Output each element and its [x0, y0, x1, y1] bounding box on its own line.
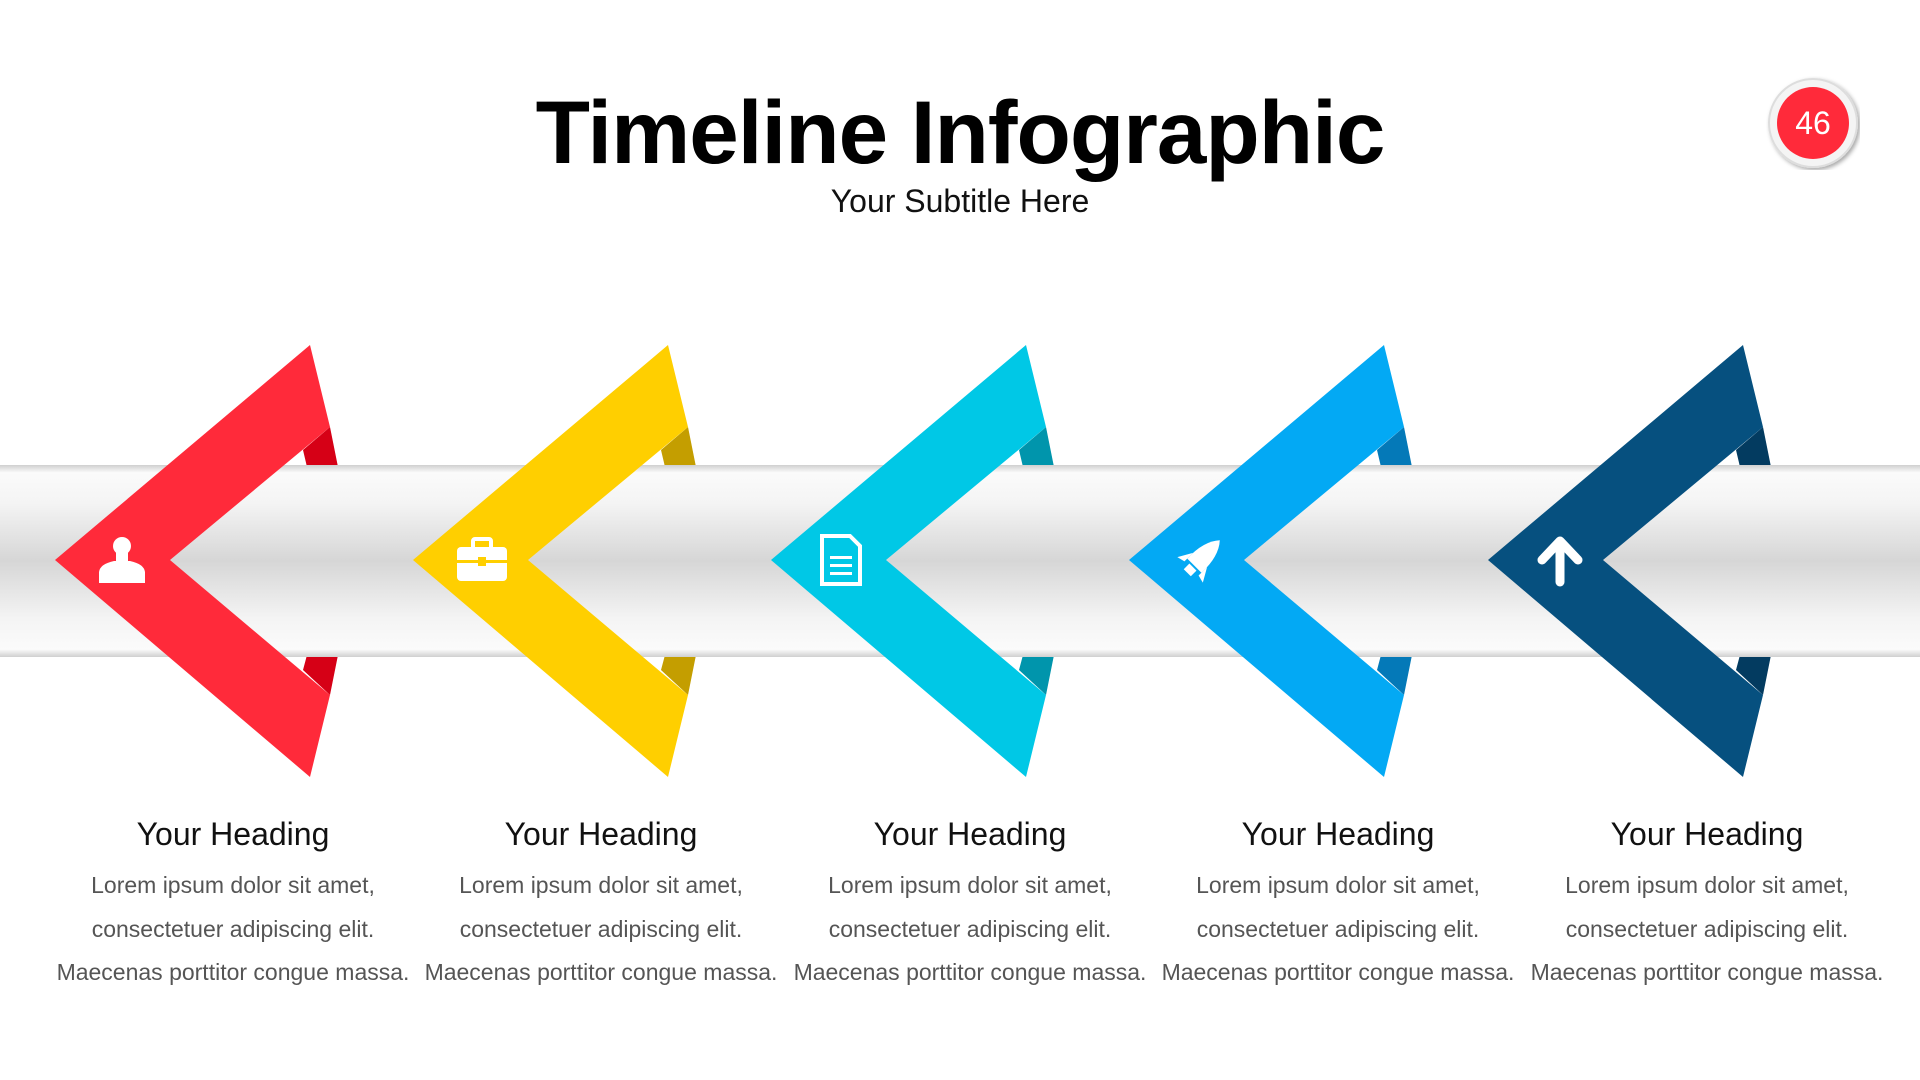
chevron 4	[1129, 345, 1404, 777]
text: column 1	[57, 816, 409, 985]
text: column 3: consectetuer adipiscing elit.	[829, 916, 1111, 942]
text: column 4	[1162, 816, 1514, 985]
chevron 3	[771, 345, 1046, 777]
text: column 4: Lorem ipsum dolor sit amet,	[1196, 872, 1480, 898]
band	[0, 465, 1920, 657]
text: column 2: Your Heading	[505, 816, 697, 852]
text: column 1: consectetuer adipiscing elit.	[92, 916, 374, 942]
text: column 4: Maecenas porttitor congue massa.	[1162, 959, 1514, 985]
text: column 4: Your Heading	[1242, 816, 1434, 852]
title: Timeline Infographic	[536, 82, 1384, 182]
chevron 1	[55, 345, 330, 777]
text: column 5: Your Heading	[1611, 816, 1803, 852]
text: column 2: Maecenas porttitor congue massa.	[425, 959, 777, 985]
text: column 1: Maecenas porttitor congue massa.	[57, 959, 409, 985]
badge: page number	[1768, 78, 1860, 170]
text: column 3: Lorem ipsum dolor sit amet,	[828, 872, 1112, 898]
text: column 1: Lorem ipsum dolor sit amet,	[91, 872, 375, 898]
text: column 2: consectetuer adipiscing elit.	[460, 916, 742, 942]
text: column 5: Maecenas porttitor congue massa.	[1531, 959, 1883, 985]
text: column 3	[794, 816, 1146, 985]
text: column 5	[1531, 816, 1883, 985]
text: column 1: Your Heading	[137, 816, 329, 852]
chevron 5	[1488, 345, 1763, 777]
text: column 5: consectetuer adipiscing elit.	[1566, 916, 1848, 942]
text: column 2: Lorem ipsum dolor sit amet,	[459, 872, 743, 898]
text: column 2	[425, 816, 777, 985]
icon: arrow up	[1542, 541, 1578, 582]
icon: briefcase	[457, 539, 507, 581]
text: column 3: Maecenas porttitor congue massa.	[794, 959, 1146, 985]
text: column 5: Lorem ipsum dolor sit amet,	[1565, 872, 1849, 898]
icon: document	[822, 536, 860, 584]
chevron 2	[413, 345, 688, 777]
icon: rocket	[1175, 527, 1233, 585]
subtitle: Your Subtitle Here	[831, 183, 1089, 219]
dark tabs	[303, 427, 1771, 695]
badge: page number: 46	[1795, 105, 1831, 141]
text: column 3: Your Heading	[874, 816, 1066, 852]
text: column 4: consectetuer adipiscing elit.	[1197, 916, 1479, 942]
icon: person	[99, 537, 145, 583]
